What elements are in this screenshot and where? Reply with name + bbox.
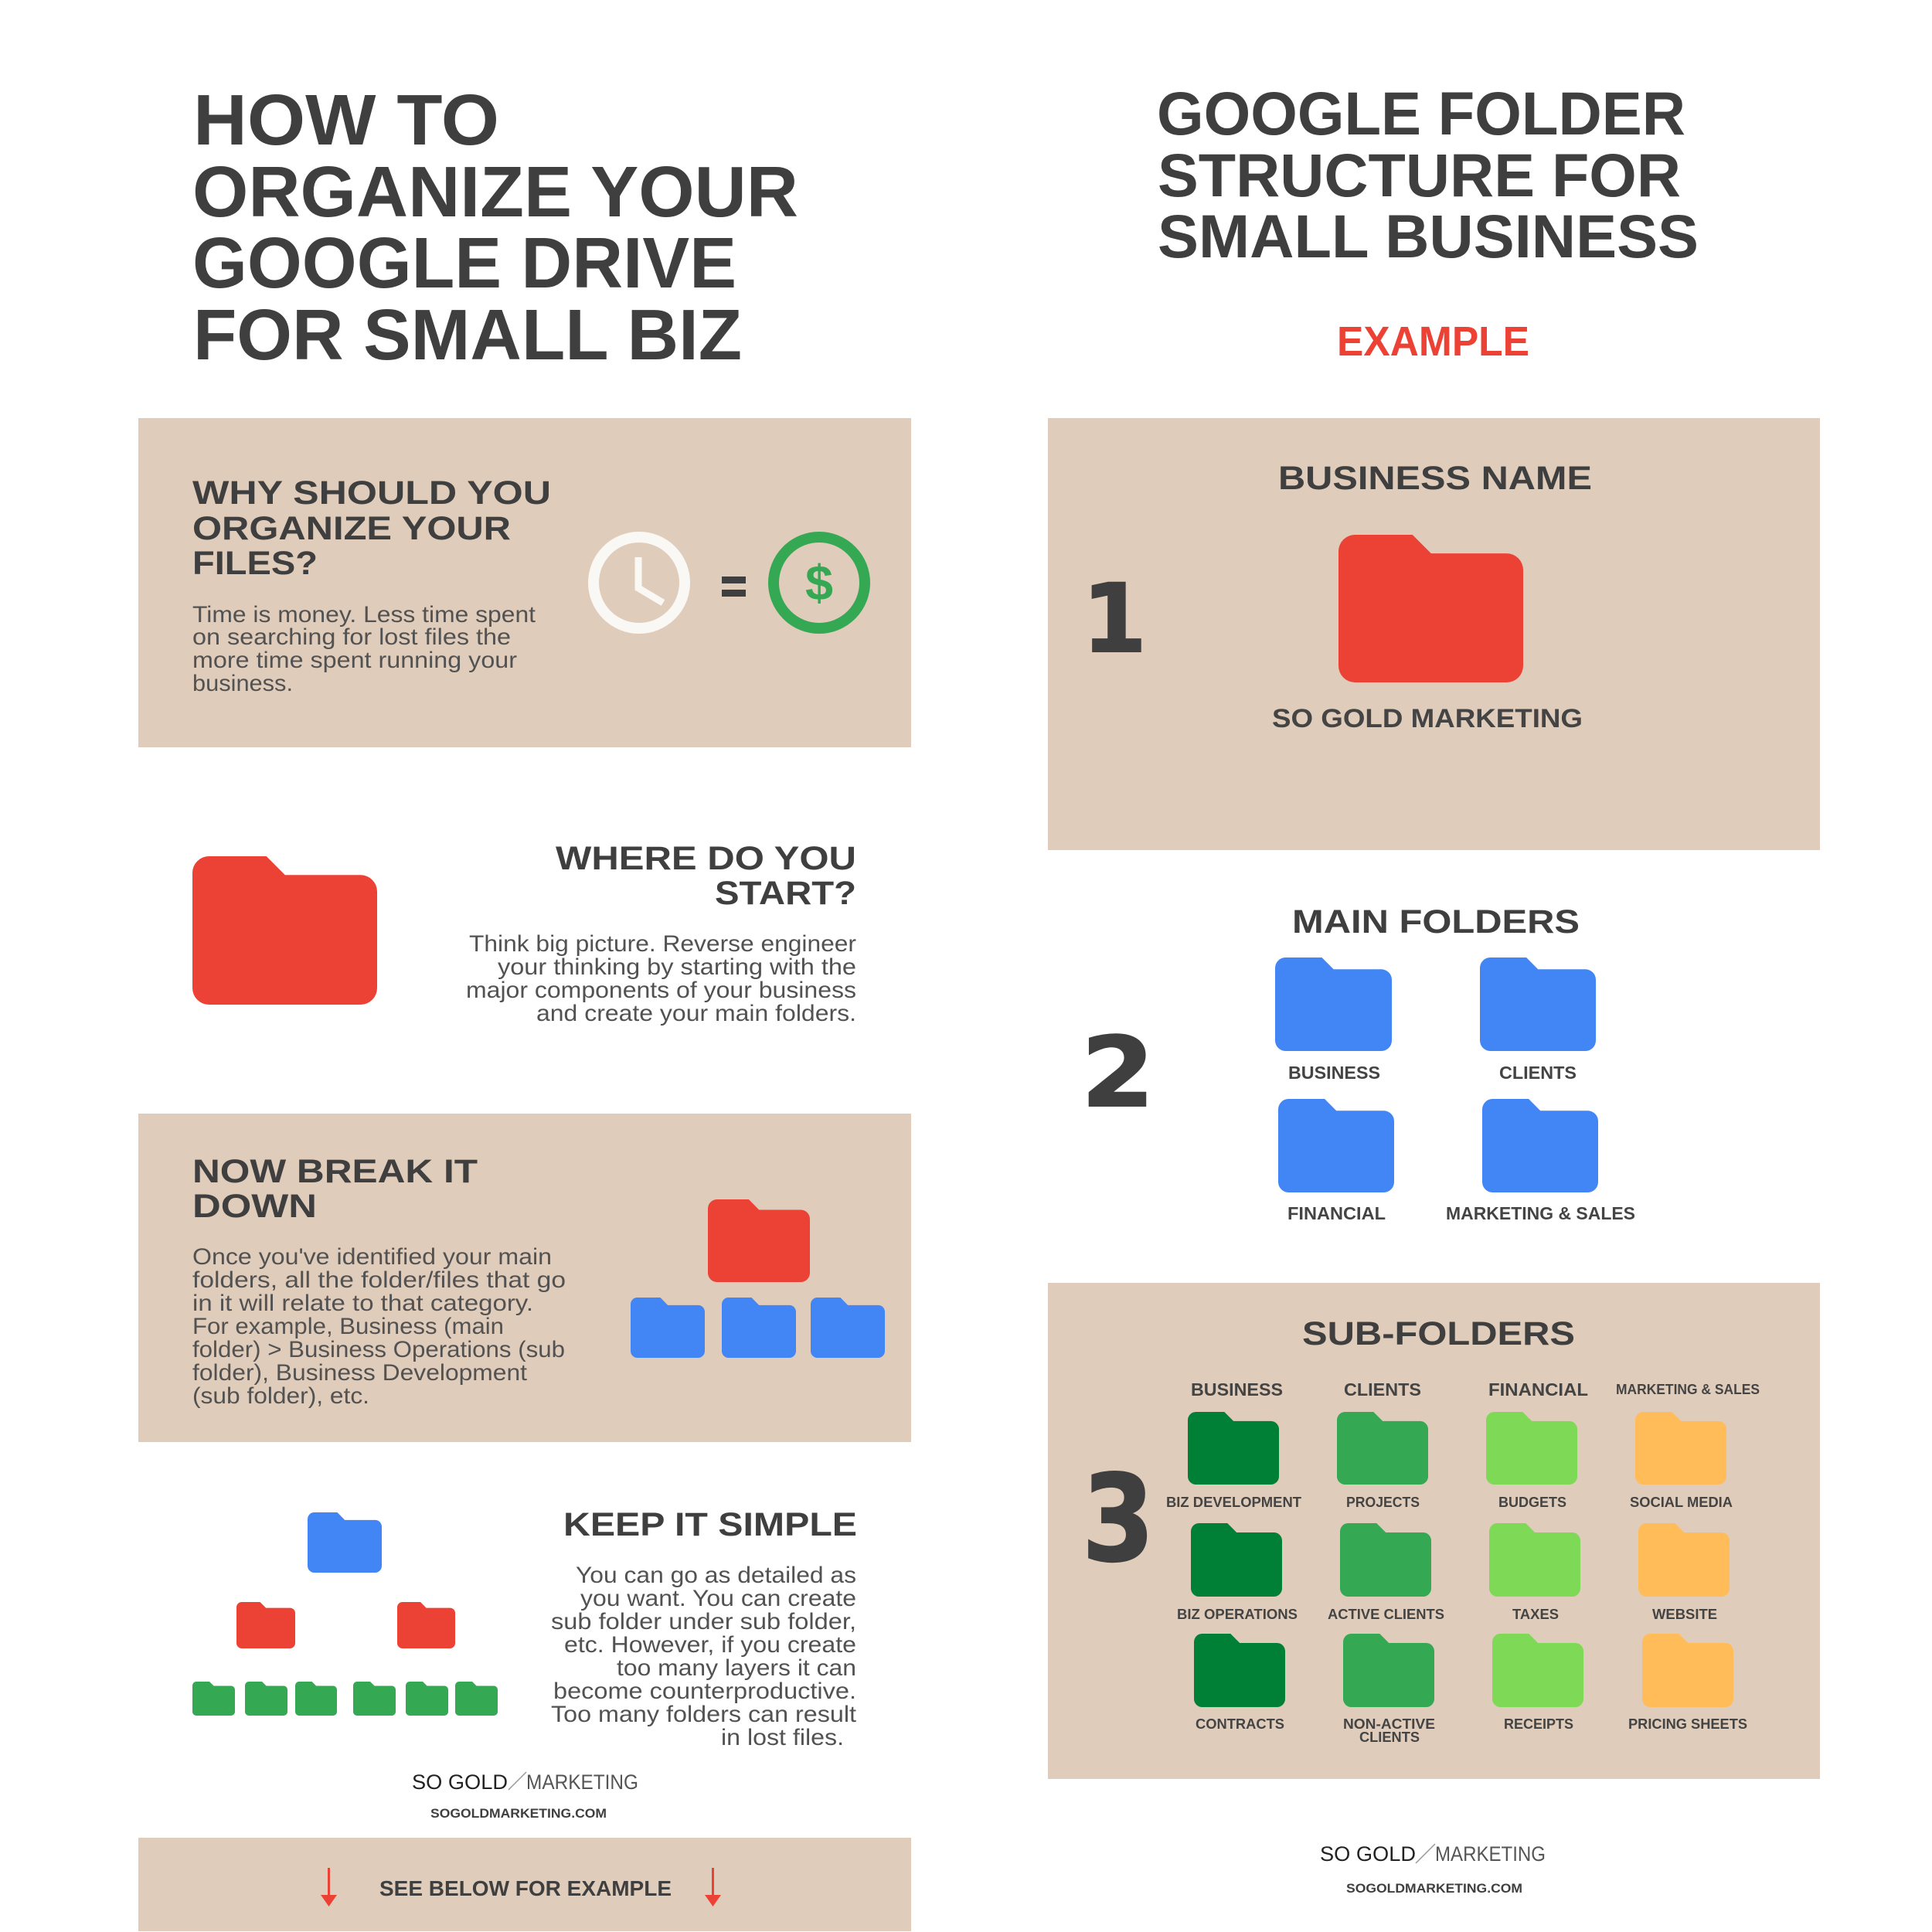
column headers: MARKETING & SALES [1616, 1381, 1760, 1397]
icon: folder tree [192, 1512, 498, 1716]
column: marketing sub-folders: PRICING SHEETS [1628, 1716, 1747, 1732]
section: main folders [1081, 903, 1635, 1223]
text: once you've identified: folders, all the folder/files that go [192, 1267, 566, 1293]
folder: marketing and sales: MARKETING & SALES [1446, 1203, 1635, 1223]
label: so gold marketing: SO GOLD MARKETING [1272, 704, 1583, 733]
panel: sub-folders [1048, 1283, 1820, 1779]
column: clients sub-folders: ACTIVE CLIENTS [1328, 1606, 1444, 1622]
heading: why should you [192, 474, 551, 582]
column: clients sub-folders: PROJECTS [1346, 1494, 1420, 1510]
title: google folder structure: SMALL BUSINESS [1158, 202, 1699, 270]
heading: where do you start [556, 840, 856, 912]
heading: now break it down: DOWN [192, 1188, 317, 1225]
text: you can go as detailed: in lost files. [721, 1725, 844, 1750]
text: you can go as detailed: sub folder under sub folder, [551, 1609, 856, 1634]
arrow: left down [321, 1868, 337, 1906]
folder: business: BUSINESS [1288, 1063, 1380, 1083]
column headers: FINANCIAL [1488, 1379, 1588, 1400]
heading: now break it down: NOW BREAK IT [192, 1153, 478, 1190]
text: once you've identified: folder) > Business Operations (sub [192, 1337, 565, 1362]
heading: example: EXAMPLE [1337, 318, 1529, 365]
text: once you've identified: For example, Business (main [192, 1314, 504, 1339]
url: left: SOGOLDMARKETING.COM [430, 1807, 607, 1821]
column: financial sub-folders: BUDGETS [1498, 1494, 1566, 1510]
url: right: SOGOLDMARKETING.COM [1346, 1882, 1522, 1896]
text: time is money: Time is money. Less time spent [192, 602, 536, 628]
title: how to organize: ORGANIZE YOUR [192, 151, 798, 232]
title: how to organize: FOR SMALL BIZ [193, 294, 742, 375]
logo: so gold marketing right [1320, 1842, 1546, 1866]
text: think big picture: major components of your business [466, 978, 856, 1003]
title: how to organize: HOW TO [193, 80, 499, 160]
text: think big picture: your thinking by starting with the [498, 954, 856, 980]
panel: now break it down [138, 1114, 911, 1442]
column: marketing sub-folders [1628, 1412, 1747, 1732]
heading: why should you: FILES? [192, 545, 318, 582]
icon: folder hierarchy [631, 1199, 885, 1358]
text: you can go as detailed: etc. However, if you create [564, 1632, 856, 1658]
text: think big picture: Think big picture. Reverse engineer [469, 931, 856, 957]
column: business sub-folders: CONTRACTS [1196, 1716, 1284, 1732]
column: business sub-folders: BIZ DEVELOPMENT [1166, 1494, 1302, 1510]
text: see below: SEE BELOW FOR EXAMPLE [379, 1876, 672, 1900]
column headers: BUSINESS [1191, 1379, 1283, 1400]
text: you can go as detailed [551, 1563, 857, 1750]
text: time is money [192, 602, 536, 696]
title: google folder structure: GOOGLE FOLDER [1157, 79, 1685, 148]
folder: business [1275, 957, 1392, 1083]
title: how to organize: GOOGLE DRIVE [192, 223, 736, 303]
heading: where do you start: START? [715, 875, 856, 912]
logo: so gold marketing left: MARKETING [526, 1770, 638, 1794]
icon: dollar coin: $ [805, 555, 833, 611]
column headers [1191, 1379, 1760, 1400]
text: once you've identified: (sub folder), etc. [192, 1383, 369, 1409]
heading: keep it simple: KEEP IT SIMPLE [563, 1506, 857, 1543]
icon: clock [594, 537, 685, 628]
logo: so gold marketing right: MARKETING [1435, 1842, 1546, 1866]
text: you can go as detailed: you want. You can create [580, 1586, 856, 1611]
arrow: right down [705, 1868, 721, 1906]
text: you can go as detailed: You can go as detailed as [576, 1563, 856, 1588]
logo: so gold marketing left: SO GOLD [412, 1770, 508, 1794]
text: time is money: more time spent running your [192, 648, 517, 673]
number: 2: 2 [1081, 1017, 1155, 1129]
title: google folder structure: STRUCTURE FOR [1158, 141, 1681, 209]
icon: equals sign [722, 577, 746, 597]
text: time is money: business. [192, 671, 293, 696]
icon: red folder [1338, 535, 1523, 682]
panel: business name [1048, 418, 1820, 850]
column: financial sub-folders: RECEIPTS [1504, 1716, 1573, 1732]
number: 3: 3 [1082, 1449, 1155, 1589]
number: 1: 1 [1082, 564, 1147, 674]
text: once you've identified: in it will relate to that category. [192, 1291, 533, 1316]
section: where do you start [192, 840, 856, 1026]
heading: why should you: ORGANIZE YOUR [192, 510, 511, 547]
heading: why should you: WHY SHOULD YOU [192, 474, 551, 512]
text: you can go as detailed: become counterproductive. [553, 1679, 856, 1704]
heading: main folders: MAIN FOLDERS [1292, 903, 1580, 940]
text: once you've identified [192, 1244, 566, 1409]
column headers: CLIENTS [1344, 1379, 1421, 1400]
logo: so gold marketing right: SO GOLD [1320, 1842, 1416, 1866]
column: marketing sub-folders: SOCIAL MEDIA [1630, 1494, 1733, 1510]
column: financial sub-folders: TAXES [1512, 1606, 1559, 1622]
folder: marketing and sales [1446, 1099, 1635, 1223]
title: how to organize [192, 80, 798, 375]
text: think big picture: and create your main folders. [536, 1001, 856, 1026]
text: once you've identified: folder), Business Development [192, 1360, 528, 1386]
folder: financial: FINANCIAL [1287, 1203, 1386, 1223]
section: keep it simple [192, 1506, 857, 1750]
folder: clients [1480, 957, 1596, 1083]
folder: clients: CLIENTS [1499, 1063, 1577, 1083]
text: once you've identified: Once you've identified your main [192, 1244, 552, 1270]
column: clients sub-folders [1328, 1412, 1444, 1745]
icon: red folder [192, 856, 377, 1005]
text: think big picture [466, 931, 856, 1026]
text: you can go as detailed: too many layers it can [617, 1655, 856, 1681]
logo: so gold marketing left [412, 1770, 638, 1794]
column: clients sub-folders: NON-ACTIVE [1343, 1716, 1435, 1732]
column: marketing sub-folders: WEBSITE [1652, 1606, 1717, 1622]
folder: financial [1278, 1099, 1394, 1223]
text: time is money: on searching for lost files the [192, 624, 511, 650]
heading: where do you start: WHERE DO YOU [556, 840, 856, 877]
heading: now break it down [192, 1153, 478, 1225]
column: business sub-folders [1166, 1412, 1302, 1732]
panel: why should you organize [138, 418, 911, 747]
heading: sub-folders: SUB-FOLDERS [1302, 1315, 1575, 1352]
column: financial sub-folders [1486, 1412, 1583, 1732]
text: you can go as detailed: Too many folders can result [551, 1702, 857, 1727]
panel: see below for example [138, 1838, 911, 1931]
title: google folder structure [1157, 79, 1699, 270]
column: clients sub-folders: CLIENTS [1359, 1729, 1420, 1745]
icon: dollar coin [774, 537, 865, 628]
heading: business name: BUSINESS NAME [1278, 460, 1592, 497]
column: business sub-folders: BIZ OPERATIONS [1177, 1606, 1298, 1622]
